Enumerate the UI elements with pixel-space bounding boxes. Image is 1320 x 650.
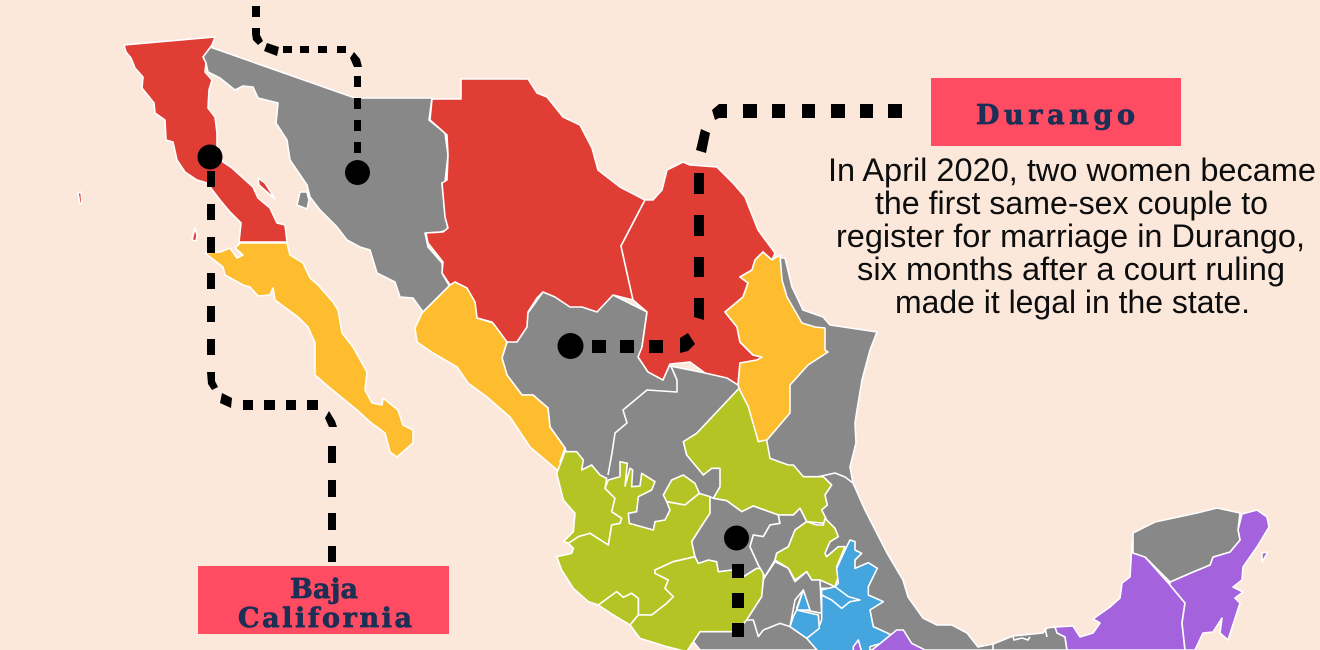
dot: Durango <box>558 333 584 359</box>
central states <box>557 388 928 650</box>
text: Durango description: In April 2020, two women became <box>828 152 1316 188</box>
state: Oaxaca <box>853 630 928 650</box>
state: Quintana Roo <box>1170 510 1269 650</box>
state: Hidalgo <box>775 518 845 587</box>
text: Durango description: six months after a court ruling <box>857 251 1285 287</box>
label: Baja California <box>198 566 449 634</box>
label: Baja California: Baja <box>290 574 358 605</box>
dashed connector: top to Sonora <box>252 6 370 185</box>
state: Campeche <box>1055 543 1185 650</box>
state: Sinaloa <box>415 282 565 470</box>
state: Mexico <box>747 562 822 637</box>
dot: Baja California <box>198 144 222 170</box>
state: Aguascalientes <box>663 475 699 505</box>
state: Puebla <box>807 540 892 650</box>
label: Durango: Durango <box>976 100 1135 131</box>
text: Durango description <box>828 152 1316 320</box>
state: San Luis Potosi <box>683 388 832 523</box>
text: Durango description: the first same-sex couple to <box>875 185 1268 221</box>
dashed connector: central state <box>724 526 749 637</box>
dashed connector: Durango <box>558 104 902 359</box>
state: Michoacan <box>630 557 763 650</box>
state: Baja California <box>78 37 287 242</box>
state: Baja California Sur <box>205 243 413 457</box>
gray state border lines <box>608 364 1047 650</box>
state: Chihuahua <box>426 79 645 342</box>
state: Estado de Mexico south <box>790 610 819 638</box>
state: Guanajuato and Queretaro <box>692 497 807 577</box>
dot: central state <box>724 526 749 550</box>
state: Coahuila <box>621 162 775 385</box>
dot: Sonora <box>345 160 370 185</box>
text: Durango description: register for marriage in Durango, <box>836 218 1305 254</box>
dashed connector: Baja California <box>198 144 337 562</box>
state: Colima <box>598 592 638 625</box>
state: Tlaxcala <box>822 587 860 608</box>
label: Durango <box>931 78 1181 146</box>
state: Yucatan <box>1133 508 1240 582</box>
state: Nuevo Leon <box>725 252 828 442</box>
state: Jalisco <box>557 462 710 615</box>
mainland gray states <box>502 258 1067 650</box>
state: Sonora <box>203 47 450 312</box>
state: Nayarit <box>557 452 622 545</box>
label: Baja California: California <box>238 603 412 634</box>
text: Durango description: made it legal in the state. <box>895 284 1250 320</box>
state: Morelos <box>797 590 810 610</box>
